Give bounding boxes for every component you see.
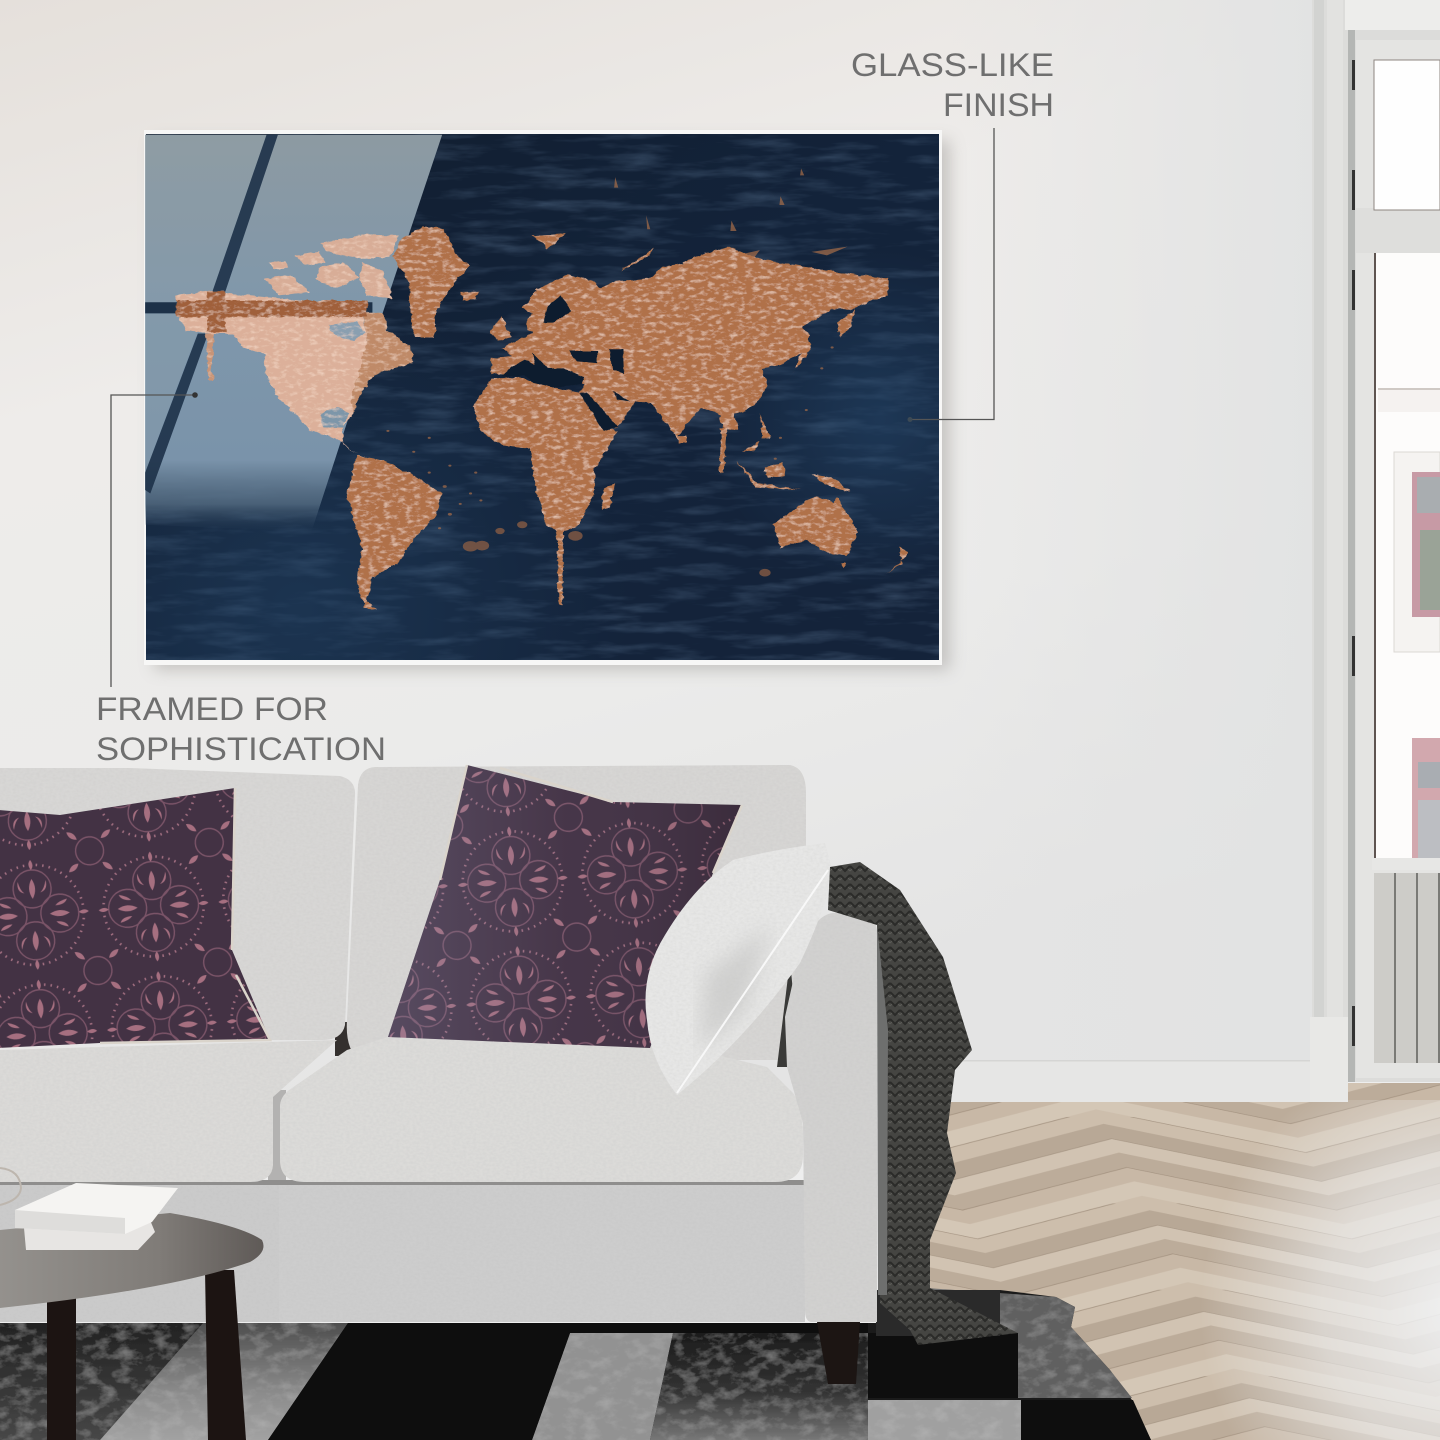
rug black blocks xyxy=(268,1323,1151,1440)
paint spots xyxy=(463,521,771,577)
rug xyxy=(0,1288,1151,1440)
white frame xyxy=(144,130,942,665)
rug marbled stripes xyxy=(0,1288,1132,1440)
pillow center xyxy=(388,765,742,1048)
table legs xyxy=(47,1270,246,1440)
callout: framed for sophistication xyxy=(96,392,386,767)
leader line xyxy=(111,392,198,687)
label text xyxy=(851,47,1054,123)
eurasia xyxy=(491,247,889,438)
sofa seat cushions xyxy=(0,1037,803,1182)
splatter xyxy=(386,168,848,529)
sofa base xyxy=(0,1182,805,1322)
label text: FRAMED FOR xyxy=(96,691,328,727)
dark blanket behind arm xyxy=(777,960,800,1067)
frame shadow xyxy=(154,140,950,670)
islands xyxy=(489,233,910,575)
sofa arm xyxy=(785,913,877,1322)
upper glass xyxy=(1374,60,1440,210)
label text: FINISH xyxy=(943,87,1054,123)
marble tabletop xyxy=(0,1213,264,1308)
lower door panel xyxy=(1372,858,1440,1063)
label text xyxy=(96,691,386,767)
canadian arctic islands xyxy=(264,234,398,299)
iceland xyxy=(460,292,478,301)
sofa back cushions xyxy=(0,765,806,1060)
continents in copper xyxy=(176,226,910,610)
dark gap between cushions xyxy=(335,1022,395,1056)
throw blanket xyxy=(828,862,1018,1345)
label text: SOPHISTICATION xyxy=(96,731,386,767)
coffee table xyxy=(0,1168,264,1440)
navy canvas xyxy=(146,134,939,660)
door frame xyxy=(1348,30,1440,1082)
south america xyxy=(347,455,442,610)
greenland xyxy=(393,226,470,337)
wall xyxy=(0,0,1320,1110)
sofa xyxy=(0,765,877,1384)
glass xyxy=(0,1168,21,1205)
inland seas xyxy=(502,295,630,431)
australia xyxy=(773,497,858,556)
shadow beside sofa arm xyxy=(876,1290,1000,1336)
world map xyxy=(145,135,910,610)
wood floor xyxy=(900,1083,1440,1440)
africa xyxy=(473,377,618,533)
framed map artwork xyxy=(144,130,950,670)
baseboard xyxy=(950,1060,1310,1102)
pillow white xyxy=(645,843,833,1095)
callout: glass-like finish xyxy=(851,47,1054,422)
sofa leg xyxy=(817,1322,860,1384)
pillow left xyxy=(0,788,270,1048)
lower glass with building view xyxy=(1374,253,1440,858)
label text: GLASS-LIKE xyxy=(851,47,1054,83)
gap between seat cushions xyxy=(268,1090,286,1185)
seat shadow line xyxy=(0,1180,805,1185)
window and door frame xyxy=(1310,0,1440,1102)
books xyxy=(15,1183,178,1250)
glass reflection xyxy=(145,135,442,532)
north america xyxy=(176,291,367,453)
trim column xyxy=(1310,0,1440,1102)
leader line xyxy=(908,128,994,422)
